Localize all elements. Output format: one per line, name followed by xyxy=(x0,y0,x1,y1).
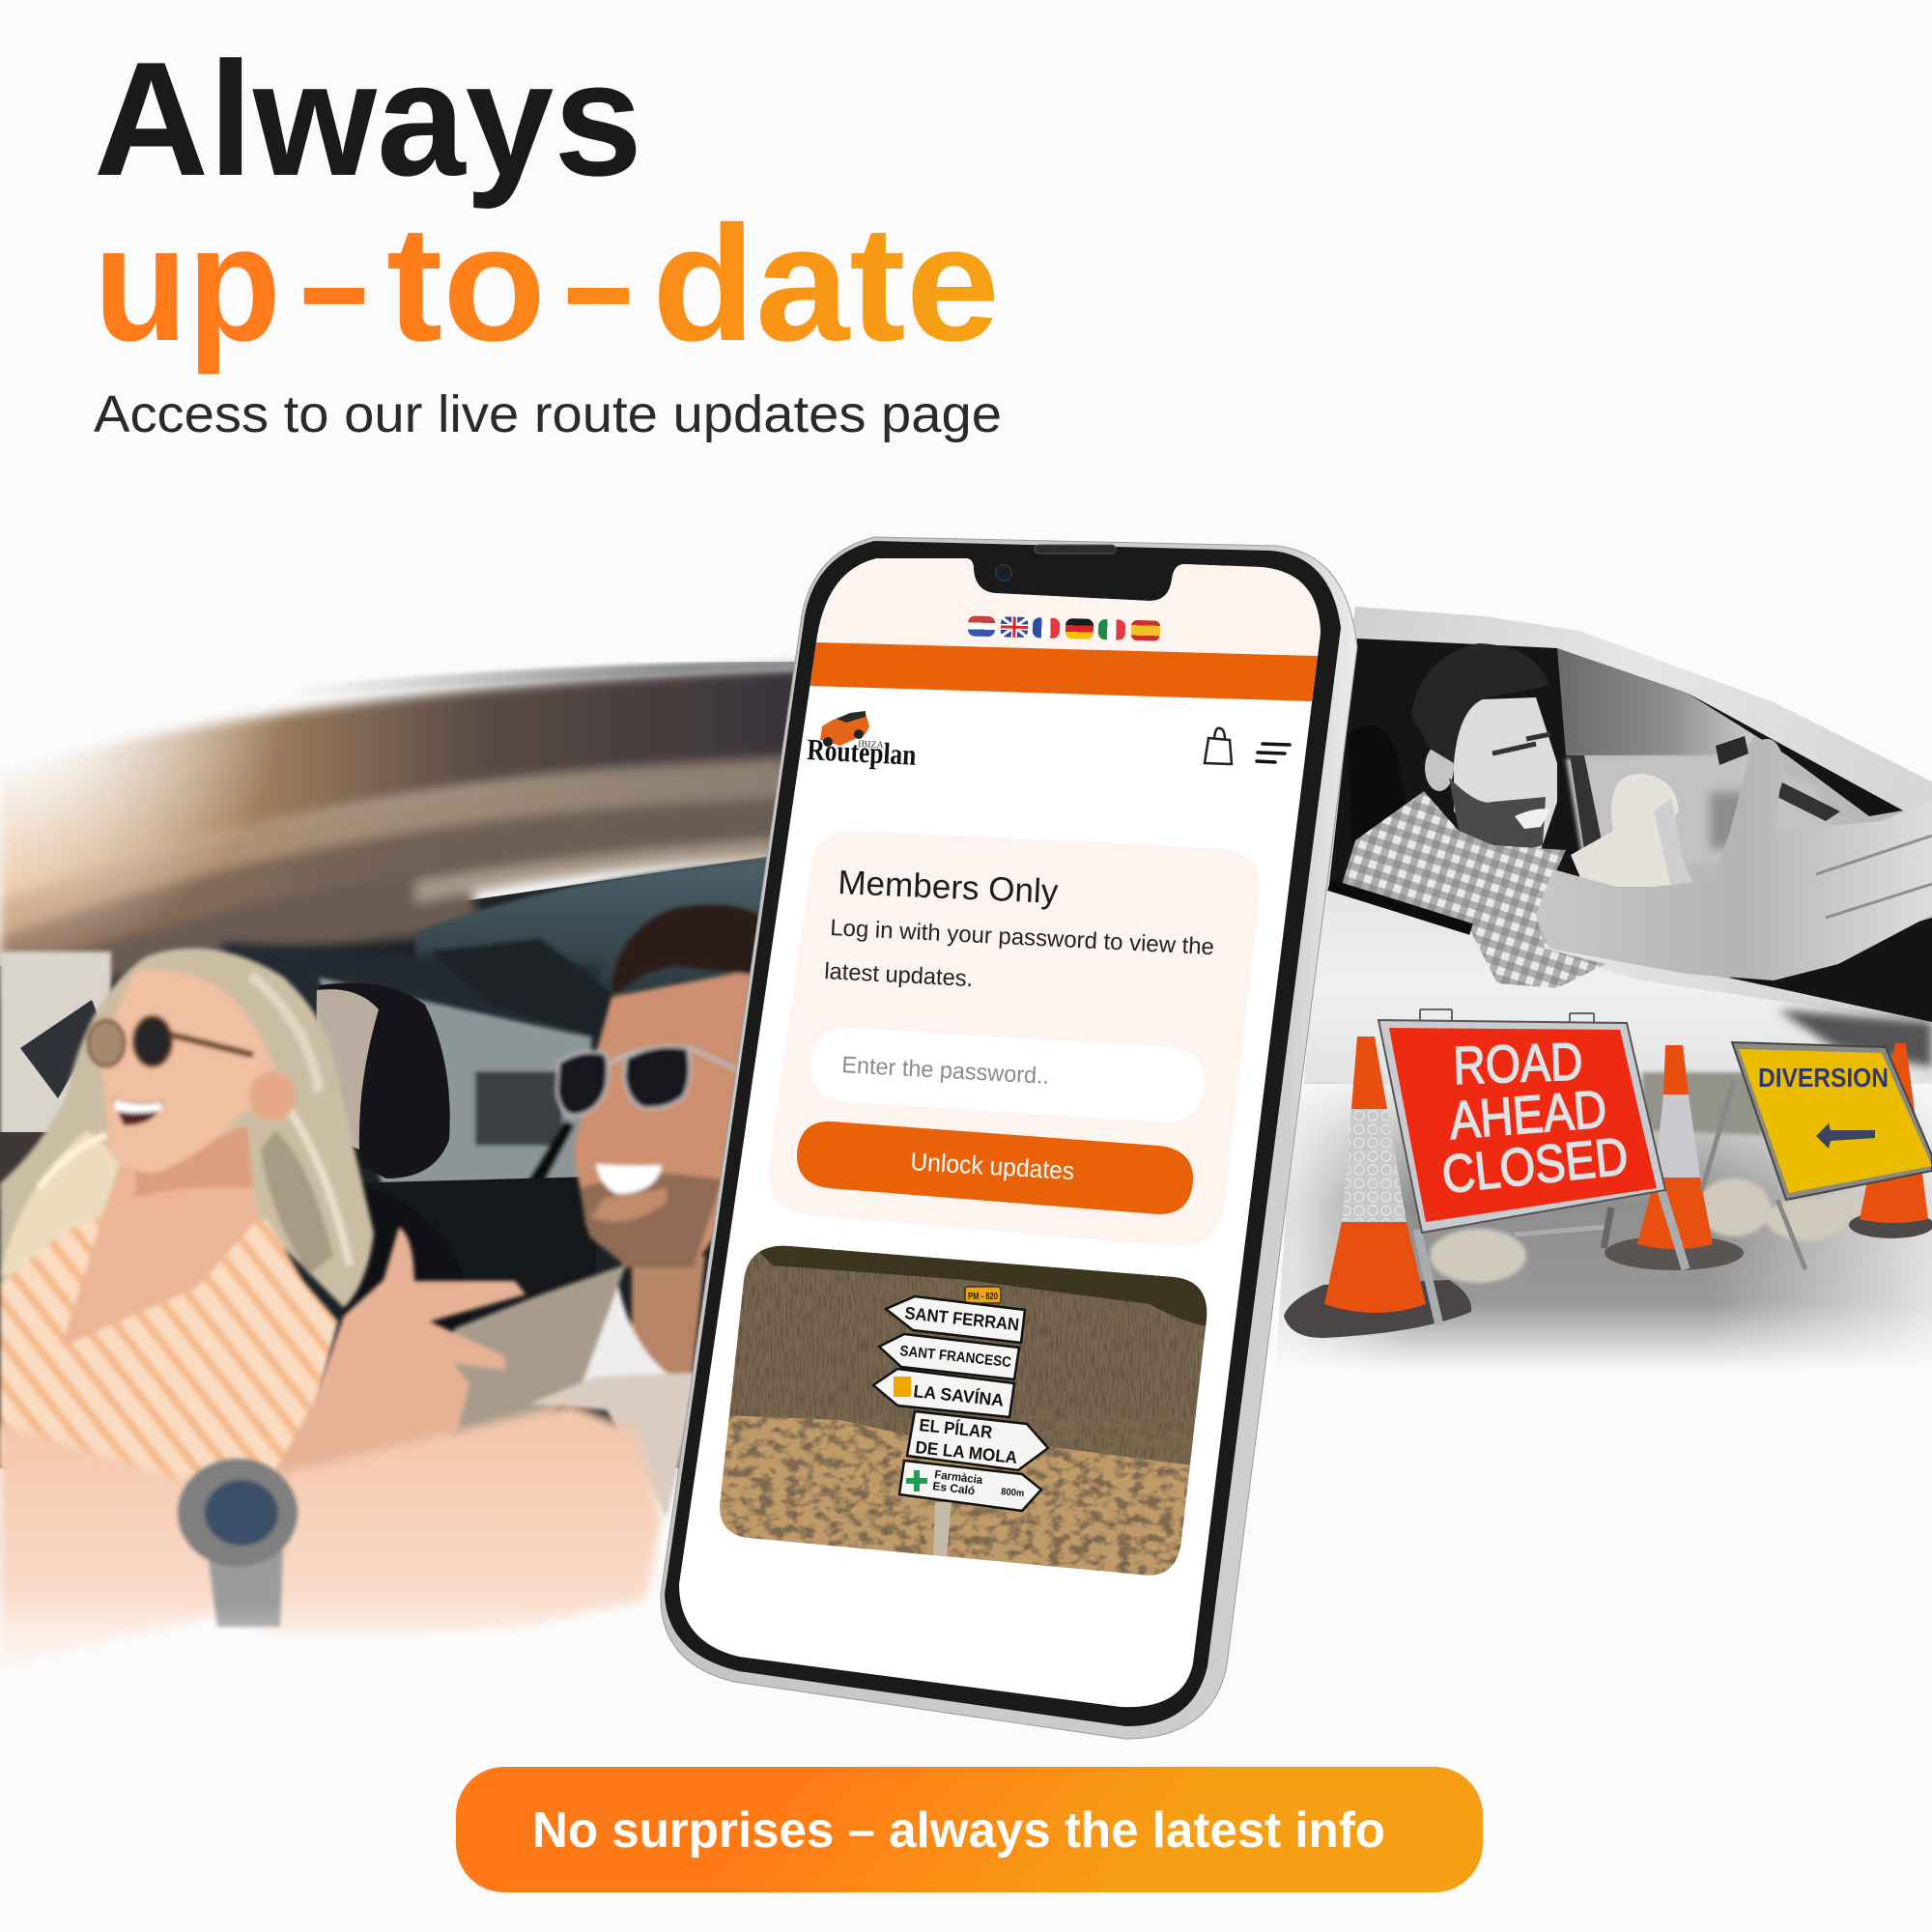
windshield interior xyxy=(1566,755,1840,869)
call to action pill xyxy=(456,1767,1483,1892)
title: up-to-date: – xyxy=(564,192,633,376)
window sill xyxy=(1329,885,1471,929)
rear view mirror xyxy=(1716,736,1748,765)
ear xyxy=(249,1071,296,1122)
flag FR xyxy=(1033,617,1060,639)
driver head xyxy=(1411,643,1557,855)
front camera xyxy=(996,565,1011,581)
lower door shade xyxy=(1777,1009,1932,1067)
sign text: ROAD xyxy=(1452,1031,1583,1095)
A-pillar xyxy=(1687,693,1903,816)
cone left xyxy=(1284,1037,1471,1338)
sun flare xyxy=(0,715,274,951)
phone bezel xyxy=(665,541,1341,1726)
rear window xyxy=(319,939,613,1200)
plate PM-820 xyxy=(965,1287,1001,1303)
dark trees xyxy=(744,1236,1217,1328)
password input xyxy=(811,1028,1204,1122)
seat xyxy=(1348,725,1406,850)
sign stands xyxy=(1417,1009,1805,1325)
logo word: Routeplan xyxy=(807,732,917,772)
head xyxy=(574,970,773,1267)
forearm xyxy=(0,1404,662,1667)
phone frame xyxy=(661,537,1357,1739)
title: up-to-date xyxy=(94,192,1000,376)
interior base xyxy=(0,850,811,1468)
black sill at right xyxy=(1729,918,1932,1022)
photo: frustrated driver at road closure xyxy=(1275,607,1932,1374)
card text line 1: Log in with your password to view the xyxy=(830,915,1215,960)
plate PM-820: PM - 820 xyxy=(968,1292,998,1302)
title: up-to-date: to xyxy=(386,192,546,376)
cone middle xyxy=(1605,1045,1744,1270)
sign: Farmacia xyxy=(899,1461,1041,1511)
sign: Farmacia: Farmàcia xyxy=(934,1467,983,1487)
icon: menu xyxy=(1257,744,1290,762)
unlock button xyxy=(797,1122,1193,1214)
car roof and door xyxy=(1304,607,1932,1092)
flag UK xyxy=(1001,616,1028,638)
flag DE xyxy=(1065,618,1094,639)
hair xyxy=(611,905,763,995)
reed fence xyxy=(705,1236,1217,1468)
sign: La Savina xyxy=(873,1369,1014,1417)
title: up-to-date: up xyxy=(94,192,281,376)
sign: El Pilar de la Mola xyxy=(907,1411,1048,1470)
sign: Farmacia: 800m xyxy=(1001,1487,1025,1499)
roof top highlight xyxy=(290,665,811,694)
sign: Sant Ferran xyxy=(886,1296,1025,1343)
sign post xyxy=(933,1502,952,1557)
photo: happy couple driving in car xyxy=(0,657,795,1662)
neck xyxy=(632,1256,705,1377)
flag NL xyxy=(968,615,995,637)
neck shadow xyxy=(135,1125,253,1198)
reaching arm xyxy=(1536,739,1932,980)
car roof bands xyxy=(0,667,811,1005)
sandbags xyxy=(1430,1179,1861,1283)
seat xyxy=(317,983,596,1333)
stone wall xyxy=(705,1415,1193,1584)
sign: Farmacia: Es Caló xyxy=(932,1479,976,1497)
button label: Unlock updates xyxy=(910,1147,1075,1185)
panel: members only card xyxy=(768,831,1260,1246)
card text line 2: latest updates. xyxy=(824,958,974,992)
cabin ceiling xyxy=(1557,648,1758,755)
finger gaps xyxy=(1816,836,1932,918)
photo: road signs on Formentera xyxy=(705,1236,1217,1584)
sign: road ahead closed xyxy=(1378,1020,1665,1233)
sign: Sant Francesc: SANT FRANCESC xyxy=(899,1343,1012,1371)
sign: diversion xyxy=(1732,1042,1932,1200)
t-shirt xyxy=(581,1284,669,1384)
road xyxy=(1275,1084,1932,1372)
pillar line xyxy=(1570,755,1604,850)
sunglasses xyxy=(166,1034,253,1055)
passenger woman xyxy=(1571,774,1695,887)
call to action text: No surprises – always the latest info xyxy=(532,1803,1385,1859)
neck and chest xyxy=(61,1125,258,1348)
window opening xyxy=(1329,639,1932,1019)
smile xyxy=(112,1098,164,1125)
wrist watch xyxy=(178,1459,298,1627)
sign text: CLOSED xyxy=(1439,1125,1631,1205)
woman xyxy=(0,949,374,1497)
logo: Routeplan xyxy=(807,711,917,772)
language flags xyxy=(968,615,1160,641)
sign: Sant Francesc xyxy=(879,1334,1019,1379)
placeholder: Enter the password.. xyxy=(841,1052,1050,1090)
sunglasses xyxy=(607,1048,744,1072)
sign text: AHEAD xyxy=(1447,1078,1608,1151)
cabin ceiling xyxy=(413,859,766,1047)
icon: arrow xyxy=(1816,1123,1875,1149)
man xyxy=(450,902,758,1519)
phone mockup xyxy=(657,537,1357,1739)
sign: El Pilar de la Mola: DE LA MOLA xyxy=(915,1437,1018,1467)
icon: orange car xyxy=(820,711,869,747)
title: up-to-date: – xyxy=(300,192,368,376)
hand xyxy=(263,1227,526,1492)
smile xyxy=(596,1164,662,1194)
title: up-to-date: date xyxy=(652,192,1000,376)
flag IT xyxy=(1098,619,1125,640)
orange bar xyxy=(810,642,1318,701)
flag ES xyxy=(1131,620,1160,641)
title: Always: Always xyxy=(94,28,642,210)
screen xyxy=(657,541,1352,1729)
face xyxy=(101,970,283,1173)
side window with sign xyxy=(0,952,111,1209)
hair xyxy=(0,949,374,1308)
subtitle: Access to our live route updates page xyxy=(94,385,1002,443)
logo small text: IBIZA xyxy=(858,739,885,751)
sleeve xyxy=(530,1373,700,1519)
dark cabin behind driver xyxy=(1329,639,1584,908)
stone wall xyxy=(1642,1072,1763,1135)
cone right xyxy=(1849,1043,1932,1238)
top strip xyxy=(802,541,1352,657)
icon: shopping bag xyxy=(1205,728,1232,764)
sign: La Savina: LA SAVÍNA xyxy=(913,1380,1005,1410)
card heading: Members Only xyxy=(838,864,1060,911)
earpiece xyxy=(1035,545,1116,554)
shirt xyxy=(0,1208,338,1497)
plaid shirt xyxy=(1342,791,1605,988)
sign: Sant Ferran: SANT FERRAN xyxy=(904,1303,1020,1334)
sign: El Pilar de la Mola: EL PÍLAR xyxy=(919,1414,993,1442)
sign text: DIVERSION xyxy=(1758,1063,1889,1093)
bottom haze xyxy=(0,1604,811,1710)
jacket xyxy=(450,1263,628,1439)
